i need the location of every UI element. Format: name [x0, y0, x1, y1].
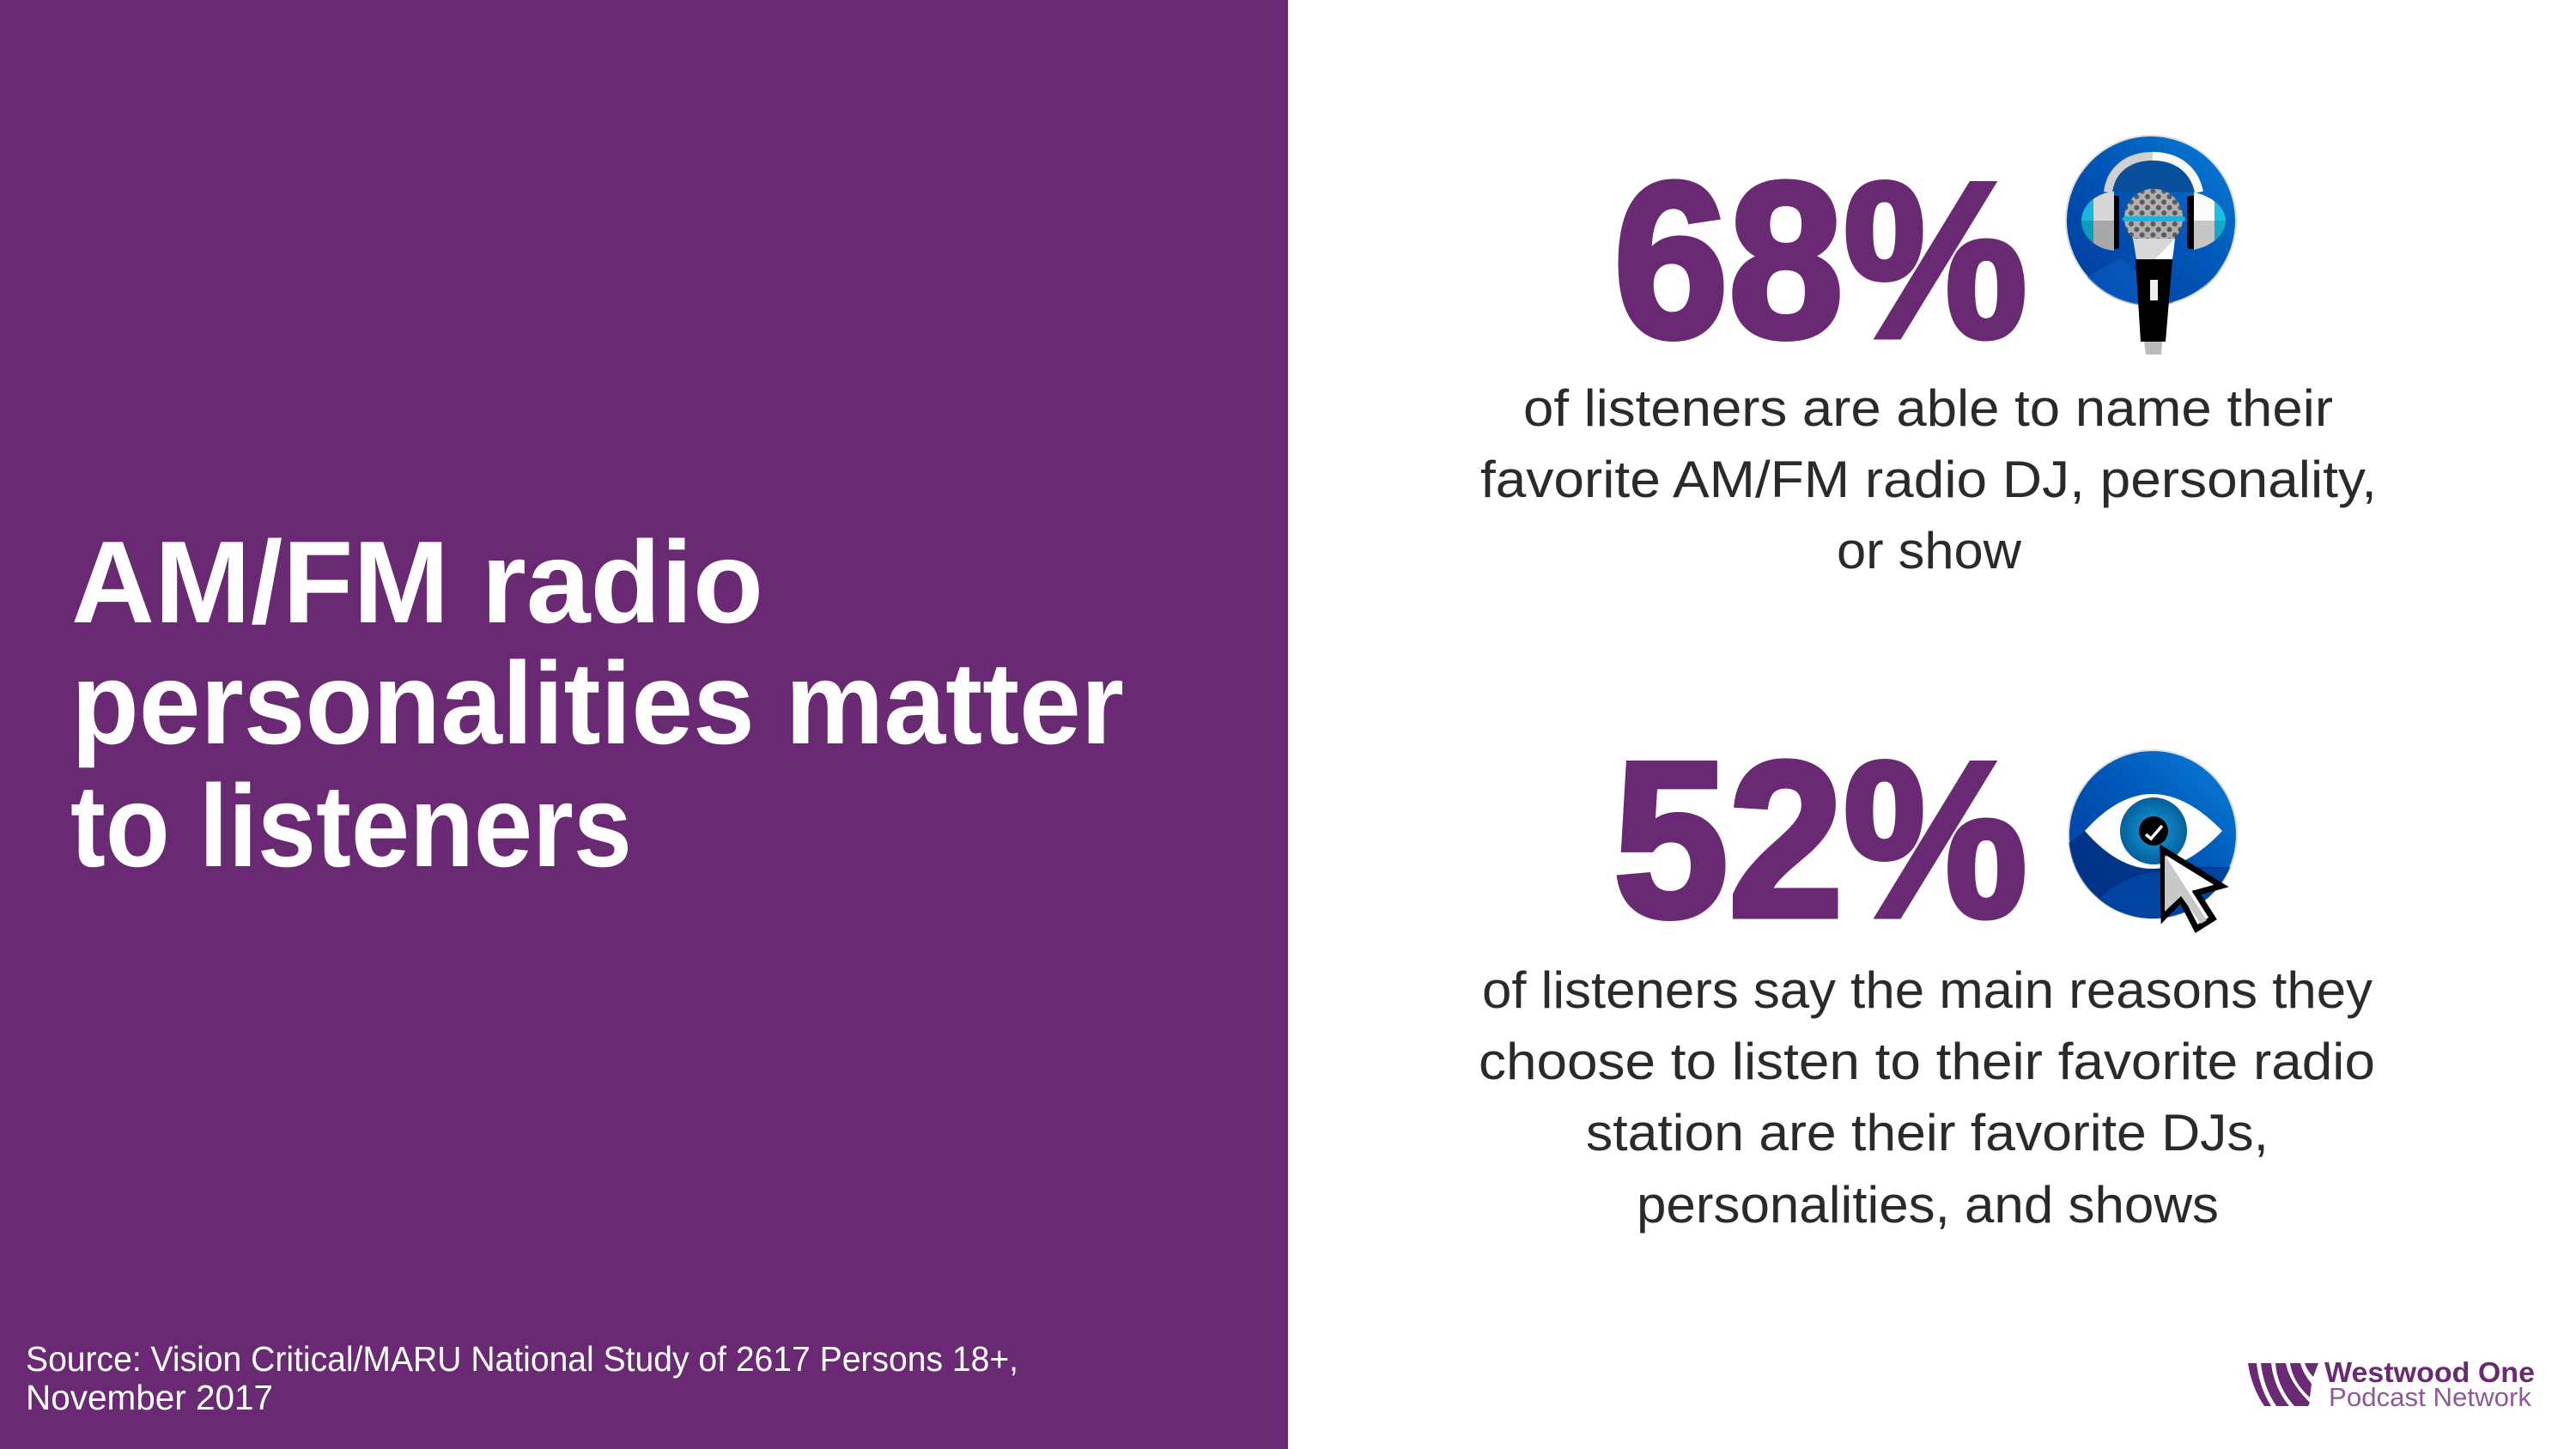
- logo: Westwood One Podcast Network: [2248, 1356, 2535, 1412]
- logo mark: [2248, 1363, 2318, 1406]
- description: 68%: [1480, 379, 2377, 579]
- logo subline: Podcast Network: [2329, 1382, 2531, 1412]
- description: 52%: personalities, and shows: [1637, 1176, 2219, 1234]
- description: 52%: [1479, 961, 2375, 1234]
- icon: microphone with headphones: [2061, 135, 2237, 355]
- description: 52%: choose to listen to their favorite radio: [1479, 1033, 2375, 1090]
- title: personalities matter: [71, 638, 1124, 768]
- source note: [26, 1339, 1018, 1417]
- description: 52%: of listeners say the main reasons they: [1482, 961, 2372, 1019]
- description: 52%: station are their favorite DJs,: [1586, 1104, 2269, 1161]
- purple panel: [0, 0, 1288, 1449]
- statistic: 68%: 68%: [1613, 136, 2027, 384]
- title: [70, 517, 1124, 891]
- source note: Source: Vision Critical/MARU National Study of 2617 Persons 18+,: [26, 1339, 1018, 1379]
- description: 68%: or show: [1837, 522, 2022, 579]
- title: AM/FM radio: [71, 517, 763, 647]
- logo wordmark: Westwood One: [2324, 1356, 2535, 1388]
- statistic: 52%: 52%: [1613, 715, 2027, 963]
- source note: November 2017: [26, 1378, 273, 1417]
- title: to listeners: [70, 761, 632, 891]
- description: 68%: of listeners are able to name their: [1523, 379, 2333, 437]
- description: 68%: favorite AM/FM radio DJ, personality,: [1480, 451, 2377, 508]
- icon: eye with cursor: [2065, 749, 2250, 929]
